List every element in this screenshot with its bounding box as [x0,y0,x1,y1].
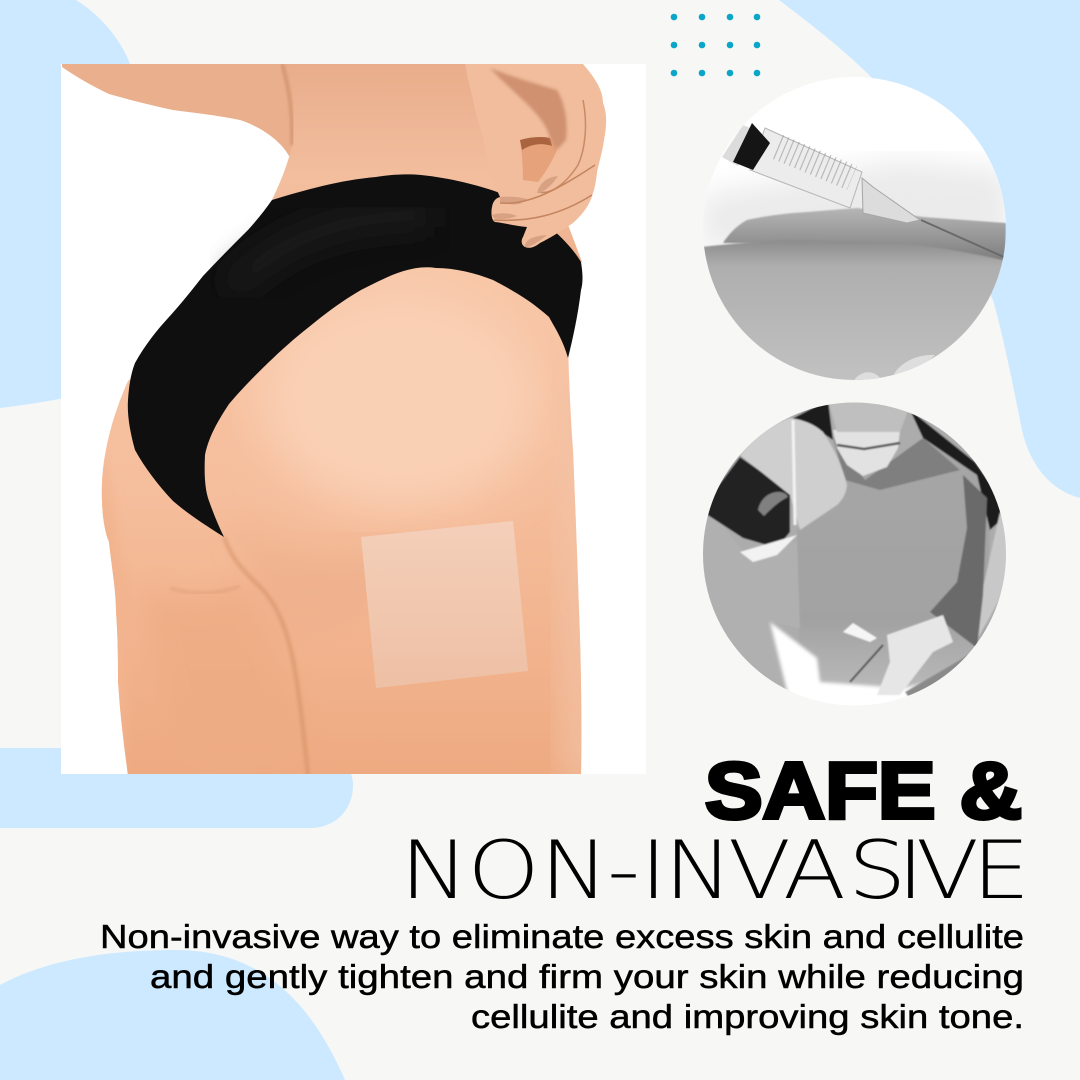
left leg shade [102,462,124,748]
main photo: body with patch [61,64,646,780]
syringe plunger [733,123,770,170]
fingers [854,355,935,380]
finger lines [494,165,595,220]
circle photo: syringe [700,75,1010,385]
arm [62,64,292,156]
syringe hub [862,178,920,223]
right edge light [554,392,582,774]
description text: and gently tighten and firm your skin while reducing [150,958,1024,995]
background blob: bottom left [0,950,345,1080]
underwear sheen [210,210,414,273]
palm fold shade [490,68,567,150]
ear [758,492,788,516]
background blob: top left [0,0,130,408]
dark backdrop [792,404,1001,530]
left surgeon head [708,456,791,545]
description text: Non-invasive way to eliminate excess skin and cellulite [100,918,1024,955]
buttock highlight [260,290,540,510]
nails [492,176,558,247]
decorative dot grid [671,14,760,76]
left surgeon body [798,618,800,625]
bright surgical light [768,622,920,706]
syringe flange [722,125,750,166]
left surgeon mask [740,535,797,562]
finger outline [538,100,585,193]
instrument [843,623,877,642]
thigh shade under buttock [230,520,450,640]
title: SAFE &: SAFE & [705,746,1022,835]
gloved hands [877,615,953,695]
inner gap [520,137,557,182]
palm [465,64,606,248]
gluteal crease [170,586,240,593]
background skin [723,208,1006,262]
background blob: mid left [0,748,353,828]
lower body [102,267,582,774]
drape [904,654,968,696]
torso [269,64,582,262]
left surgeon cap [740,418,847,530]
title: NON-INVASIVE: NON-INVASIVE [400,825,1030,917]
hand [465,64,606,248]
surgeon gown centre [798,536,988,686]
syringe barrel [750,128,862,208]
description text [100,918,1024,1035]
dark sleeve [930,475,987,648]
foreground skin [700,240,1010,385]
right edge figure [978,512,1006,637]
collar shade [833,438,960,490]
standing surgeon head [833,430,900,476]
underwear [128,174,582,537]
needle [921,220,1006,258]
torso side shade [282,64,292,145]
background blob: top right [779,0,1080,498]
circle photo: surgeons [703,402,1006,706]
skin patch [361,521,528,688]
description text: cellulite and improving skin tone. [471,998,1024,1035]
